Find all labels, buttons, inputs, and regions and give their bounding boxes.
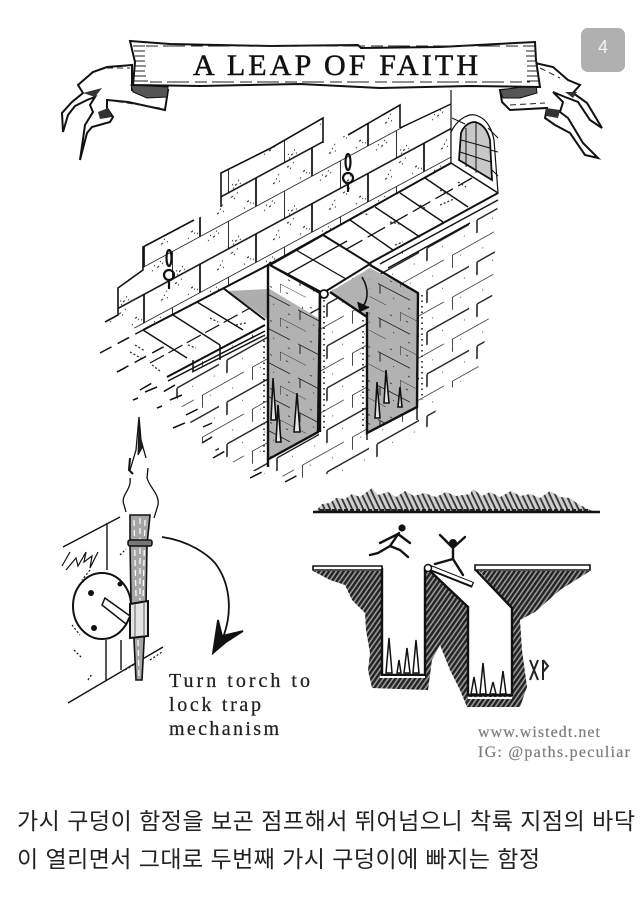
korean caption: 이 열리면서 그대로 두번째 가시 구덩이에 빠지는 함정 <box>17 846 540 872</box>
first pit spikes <box>271 378 300 442</box>
torch caption: mechanism <box>169 718 279 740</box>
dashed fading wall edge <box>100 330 300 482</box>
banner with title <box>62 41 602 160</box>
banner left tail <box>62 65 168 160</box>
first shaft <box>380 568 425 677</box>
second pit spikes <box>471 663 506 694</box>
korean caption <box>17 808 635 872</box>
leaping figure <box>370 526 410 557</box>
earth hatching <box>313 571 590 707</box>
floor ledge right <box>272 163 498 268</box>
website credits: IG: @paths.peculiar <box>478 744 631 761</box>
speckled shadow along pit edges <box>264 295 422 455</box>
wall chain right <box>343 154 353 192</box>
wall chain left <box>164 250 174 289</box>
arched door <box>451 115 498 193</box>
title: A LEAP OF FAITH <box>193 49 478 82</box>
isometric trap corridor <box>100 90 505 482</box>
central pillar top stones <box>270 235 370 432</box>
banner body <box>130 41 540 88</box>
korean caption: 가시 구덩이 함정을 보곤 점프해서 뛰어넘으니 착륙 지점의 바닥 <box>17 808 635 834</box>
pivot hinge <box>320 290 328 298</box>
second pit spikes <box>375 370 402 418</box>
ground surface left <box>313 566 382 570</box>
upper stone wall <box>100 90 460 340</box>
lower brick wall <box>176 208 498 478</box>
torch caption: Turn torch to <box>169 670 310 692</box>
rune mark <box>530 660 548 680</box>
floor ledge left <box>130 263 272 381</box>
second pit gray wall <box>330 265 418 440</box>
grass <box>313 488 600 512</box>
torch detail <box>62 417 318 740</box>
ground surface right <box>475 565 590 570</box>
page number badge: 4 <box>598 37 608 57</box>
page number badge <box>581 28 625 72</box>
torch handle <box>128 515 152 680</box>
banner right tail <box>500 63 602 158</box>
turn arrow <box>162 537 243 653</box>
hinged trap flap <box>424 564 473 585</box>
second shaft <box>427 566 512 698</box>
wall lines <box>62 517 163 703</box>
flame <box>123 417 158 518</box>
falling figure <box>435 535 465 575</box>
first pit gray wall <box>223 263 320 467</box>
first pit spikes <box>386 638 419 673</box>
pit cross-section <box>313 488 600 707</box>
website credits <box>478 724 631 761</box>
torch caption: lock trap <box>169 694 261 716</box>
rotation arrow <box>358 277 369 311</box>
website credits: www.wistedt.net <box>478 724 601 741</box>
wall disc <box>73 573 131 639</box>
